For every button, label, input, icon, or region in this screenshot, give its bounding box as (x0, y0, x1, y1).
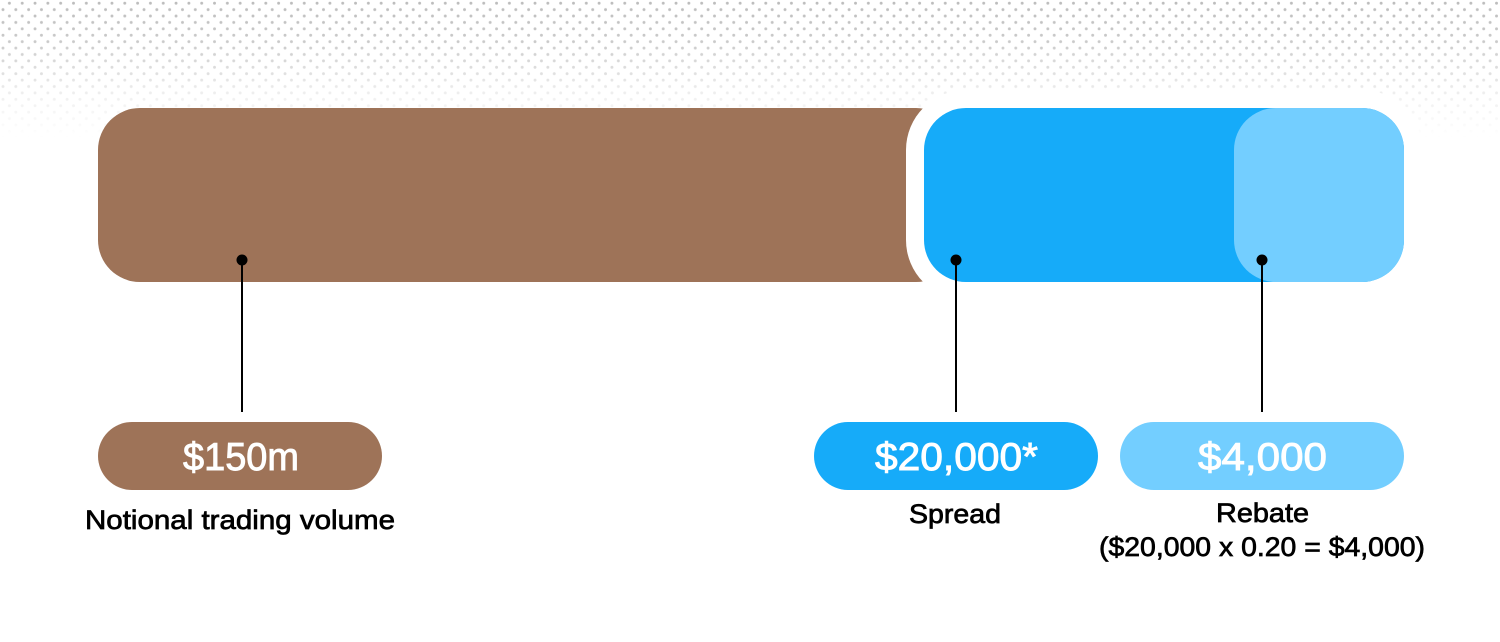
bar: spread (924, 108, 1404, 282)
pill: $4,000 (1120, 422, 1404, 490)
pill: $4,000: $4,000 (1198, 436, 1327, 479)
pill: $150m (98, 422, 382, 490)
bar: notional trading volume (98, 108, 958, 282)
label: rebate with formula (1099, 498, 1425, 562)
bar: rebate (1234, 108, 1404, 282)
dotted background pattern (2, 2, 1498, 113)
label: notional trading volume: Notional trading volume (85, 505, 395, 535)
label: rebate with formula: ($20,000 x 0.20 = $4,000) (1099, 532, 1425, 562)
connector: spread (950, 254, 962, 412)
label: rebate with formula: Rebate (1216, 498, 1309, 528)
connector: rebate (1256, 254, 1268, 412)
pill: $150m: $150m (183, 436, 299, 479)
white outline around spread bar (906, 90, 1422, 300)
pill: $20,000 (814, 422, 1098, 490)
label: spread: Spread (909, 499, 1001, 529)
pill: $20,000: $20,000* (875, 436, 1038, 479)
connector: notional trading volume (236, 254, 248, 412)
